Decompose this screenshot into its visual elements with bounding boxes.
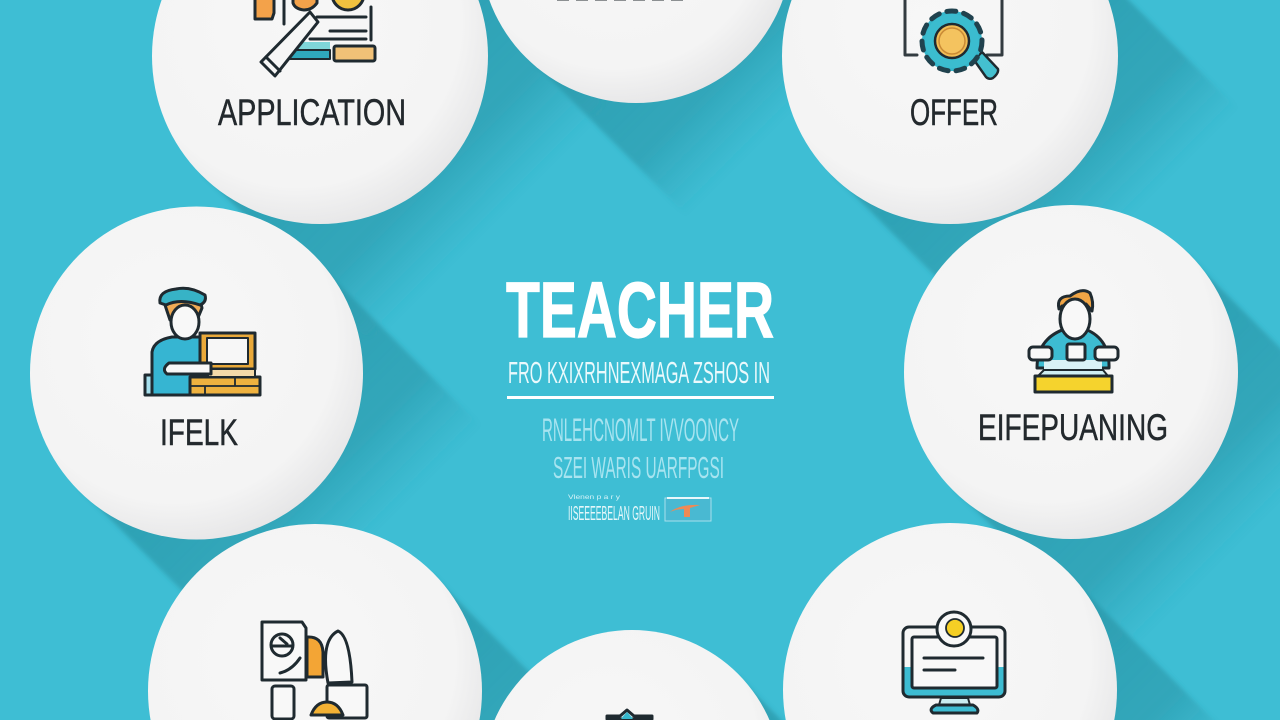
subtitle: FRO KXIXRHNEXMAGA ZSHOS IN bbox=[508, 355, 770, 390]
label: ifelk: IFELK bbox=[160, 412, 238, 453]
icon: gear and magnifier bbox=[905, 0, 1002, 79]
small caption: Vlenen p a r y bbox=[568, 495, 620, 501]
panel: bottom left bbox=[148, 524, 482, 720]
icon: small logo bbox=[665, 497, 711, 521]
icon: person at desk bbox=[1029, 291, 1118, 392]
panel: application bbox=[152, 0, 488, 224]
central title block: SZEI WARIS UARFPGSI bbox=[553, 450, 724, 485]
panel: offer bbox=[782, 0, 1118, 224]
icon: monitor bbox=[903, 612, 1005, 713]
clipped top label bbox=[557, 0, 690, 1]
icon: person at computer bbox=[145, 288, 260, 395]
icon: document and figure bbox=[262, 622, 367, 719]
panel: left bbox=[30, 206, 363, 540]
heading: teacher: TEACHER bbox=[506, 265, 774, 354]
panel: right bbox=[904, 205, 1238, 539]
panel: bottom centre bbox=[482, 630, 782, 720]
central title block: RNLEHCNOMLT IVVOONCY bbox=[542, 412, 739, 448]
central title block: IISEEEEBELAN GRUIN bbox=[568, 503, 660, 525]
label: offer: OFFER bbox=[910, 92, 998, 133]
label: eifepuaning: EIFEPUANING bbox=[978, 407, 1168, 448]
panel: bottom right bbox=[783, 523, 1117, 720]
icon: clipped star badge bbox=[607, 710, 652, 719]
label: application: APPLICATION bbox=[218, 92, 406, 133]
icon: application form and pen bbox=[255, 0, 375, 76]
central title block bbox=[506, 265, 774, 525]
divider bbox=[507, 396, 774, 399]
panel: top centre bbox=[480, 0, 792, 103]
